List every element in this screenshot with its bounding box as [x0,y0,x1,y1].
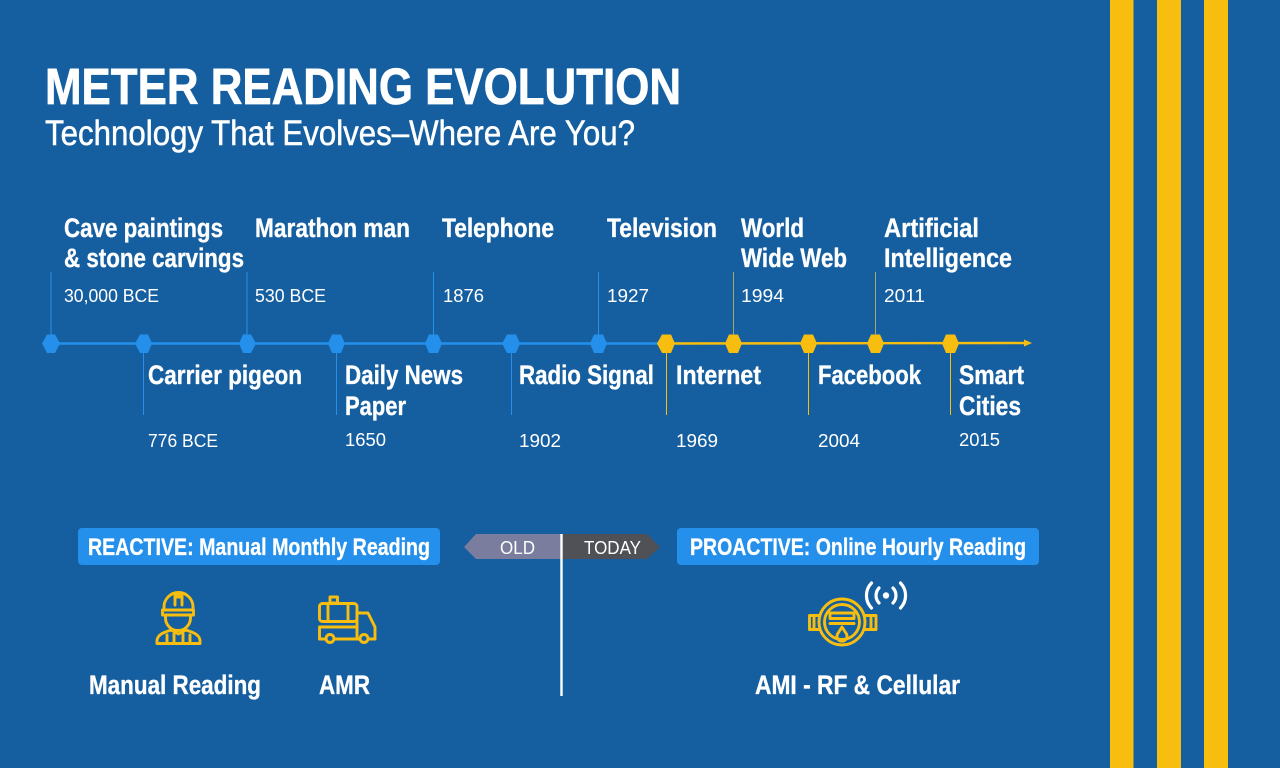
event: marathon man: 530 BCE [255,285,326,306]
timeline axis: blue past segment [51,342,666,345]
event: artificial intelligence [884,213,1012,306]
event: internet: 1969 [676,430,718,451]
event: telephone: 1876 [443,285,484,306]
panel: proactive [677,528,1039,700]
event: cave paintings: 30,000 BCE [64,285,159,306]
event: artificial intelligence: Artificial [884,213,979,243]
event: television: Television [607,213,717,243]
icon: worker with hard hat [157,592,200,644]
event: marathon man: Marathon man [255,213,410,243]
event: television [607,213,717,306]
reactive heading pill [78,528,440,565]
event: world wide web: 1994 [741,285,784,306]
event: radio signal: 1902 [519,430,561,451]
label: AMR: AMR [319,670,370,700]
event: world wide web [741,213,847,306]
event: artificial intelligence: Intelligence [884,243,1012,273]
icon: wireless signal [866,583,906,608]
event: daily news paper: Paper [345,391,406,421]
event: world wide web: World [741,213,804,243]
event: smart cities [959,360,1024,450]
arrow: old [464,534,561,559]
panel: reactive [78,528,440,700]
event: facebook: 2004 [818,430,860,451]
event: smart cities: 2015 [959,429,1000,450]
event: cave paintings: Cave paintings [64,213,223,243]
reactive heading pill: REACTIVE: Manual Monthly Reading [88,534,430,561]
event: television: 1927 [607,285,649,306]
event: carrier pigeon [148,360,302,451]
arrow: today: TODAY [584,537,641,558]
event: facebook: Facebook [818,360,922,390]
event: telephone [442,213,554,306]
decorative yellow stripes [1110,0,1228,768]
upward stems [51,272,876,343]
subtitle: Technology That Evolves–Where Are You? [45,114,635,153]
event: cave paintings: & stone carvings [64,243,244,273]
event: artificial intelligence: 2011 [884,285,925,306]
title: METER READING EVOLUTION [45,58,681,115]
downward stems [144,343,950,415]
timeline [42,213,1032,451]
icon: water meter [810,599,876,645]
event: radio signal [519,360,654,451]
event: internet: Internet [676,360,761,390]
event: world wide web: Wide Web [741,243,847,273]
icon: AMR truck [320,597,375,642]
event: cave paintings [64,213,244,306]
label: AMI RF and cellular: AMI - RF & Cellular [755,670,960,700]
blue hexagon nodes [42,334,607,353]
proactive heading pill: PROACTIVE: Online Hourly Reading [690,534,1026,561]
event: telephone: Telephone [442,213,554,243]
event: radio signal: Radio Signal [519,360,654,390]
event: internet [676,360,761,451]
label: manual reading: Manual Reading [89,670,261,700]
event: marathon man [255,213,410,306]
event: smart cities: Cities [959,391,1021,421]
event: smart cities: Smart [959,360,1024,390]
event: facebook [818,360,922,451]
arrow: today [561,534,660,559]
timeline axis: yellow recent segment with arrow [666,340,1032,346]
event: carrier pigeon: Carrier pigeon [148,360,302,390]
event: daily news paper: 1650 [345,429,386,450]
event: daily news paper [345,360,463,450]
arrow: old: OLD [500,537,535,558]
event: carrier pigeon: 776 BCE [148,430,218,451]
event: daily news paper: Daily News [345,360,463,390]
divider line: old versus today [560,534,563,696]
yellow hexagon nodes [657,334,959,353]
proactive heading pill [677,528,1039,565]
